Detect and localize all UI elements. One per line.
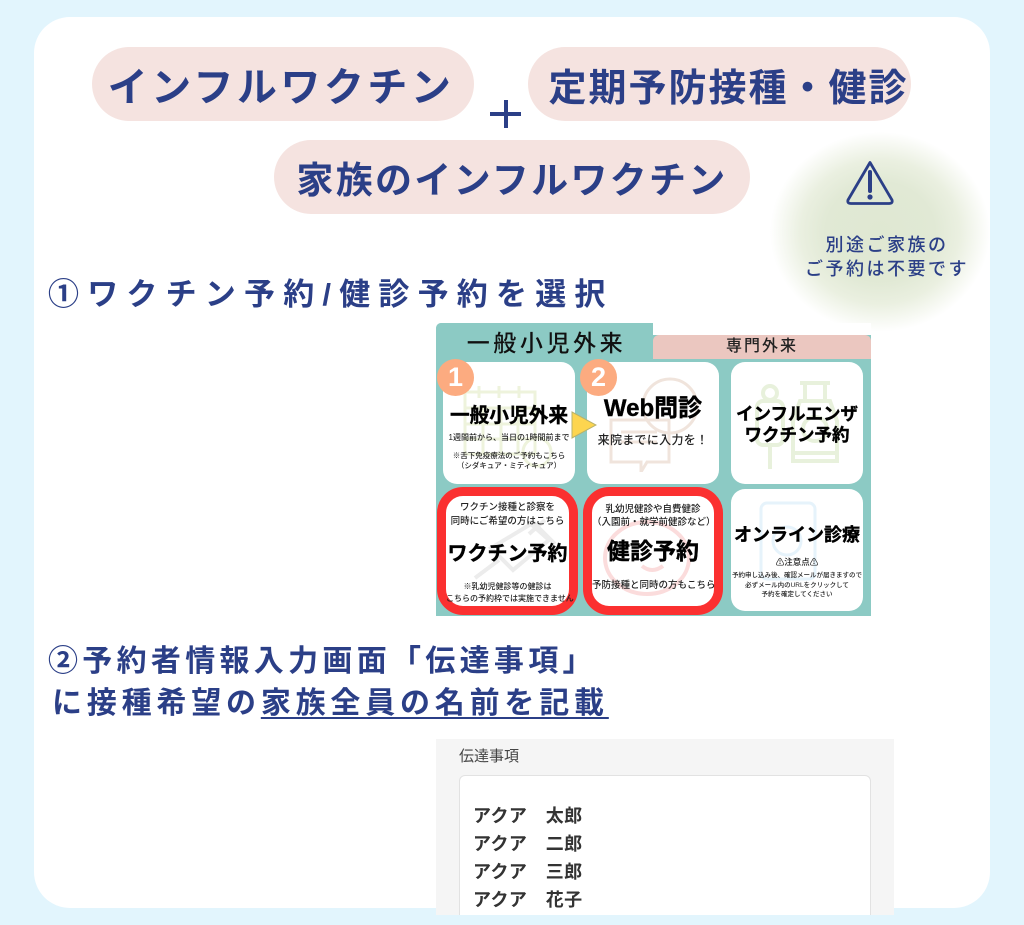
plus sign: [490, 100, 521, 128]
card caution note: [732, 572, 862, 598]
card caution note: 予約を確定してください: [761, 591, 833, 598]
card footnote: こちらの予約枠では実施できません: [446, 594, 574, 603]
icon: faint smartphone doctor: [760, 502, 816, 580]
card title: オンライン診療: [734, 525, 860, 545]
icon: faint calendar: [464, 386, 552, 468]
step 2 heading: ②予約者情報入力画面「伝達事項」: [48, 645, 597, 678]
heading pill: インフルワクチン: インフルワクチン: [108, 66, 454, 110]
card note: 来院までに入力を！: [598, 433, 708, 447]
text box with names: [459, 775, 871, 925]
heading pill: 家族のインフルワクチン: 家族のインフルワクチン: [296, 160, 728, 201]
callout: no separate family booking needed: [770, 132, 990, 332]
step 2 subheading: に接種希望の家族全員の名前を記載: [52, 687, 609, 720]
card footnote: 予防接種と同時の方もこちら: [592, 580, 716, 591]
card note: 1週間前から、当日の1時間前まで: [449, 433, 569, 442]
name list: アクア 太郎: [473, 806, 582, 826]
callout text: 別途ご家族の: [826, 235, 948, 255]
icon: faint baby face: [603, 520, 691, 596]
numbered badge 2: [580, 359, 617, 396]
card title: 一般小児外来: [450, 405, 568, 427]
card heading note: （入園前・就学前健診など）: [592, 517, 716, 528]
card footnote: （シダキュア・ミティキュア）: [457, 460, 561, 470]
card title: インフルエンザ: [736, 404, 858, 424]
card heading note: ワクチン接種と診察を: [460, 502, 555, 513]
heading pill: 家族のインフルワクチン: [274, 140, 750, 214]
name list: アクア 三郎: [473, 862, 582, 882]
card: online consultation: [731, 489, 863, 611]
card: general pediatrics: [443, 362, 575, 484]
card heading note: [451, 502, 564, 527]
card: health check booking, red outline: [583, 487, 723, 615]
icon: faint vaccine vial: [755, 381, 839, 469]
step 1 heading: ①ワクチン予約/健診予約を選択: [48, 277, 614, 312]
card title: ワクチン予約: [448, 543, 568, 565]
card title: ワクチン予約: [744, 425, 850, 445]
callout text: ご予約は不要です: [805, 259, 969, 279]
card heading note: [592, 504, 716, 528]
card title: Web問診: [604, 395, 702, 422]
card caution heading: ⚠注意点⚠: [776, 557, 818, 567]
card: vaccine booking, red outline: [437, 487, 578, 615]
icon: faint syringe: [474, 518, 556, 580]
card footnote: ※乳幼児健診等の健診は: [464, 582, 552, 591]
card heading note: 乳幼児健診や自費健診: [605, 504, 700, 515]
card footnote: [446, 582, 574, 603]
tab background: white corner: [653, 323, 871, 335]
numbered badge 1: [437, 359, 474, 396]
name list: アクア 花子: [473, 890, 582, 910]
name list: アクア 二郎: [473, 834, 582, 854]
heading pill: 定期予防接種・健診: [528, 47, 911, 121]
tab: specialist outpatient: 専門外来: [726, 338, 798, 355]
card caution note: 必ずメール内のURLをクリックして: [745, 582, 849, 588]
screenshot: booking menu: [436, 323, 871, 616]
name list: [473, 806, 582, 910]
tab: specialist outpatient: [653, 335, 871, 359]
numbered badge 1: 1: [448, 362, 463, 392]
card title: [736, 404, 858, 445]
tab: general pediatrics: 一般小児外来: [467, 330, 626, 356]
icon: warning triangle: [846, 161, 894, 205]
callout text: [805, 235, 969, 279]
card caution note: 予約申し込み後、確認メールが届きますので: [732, 572, 862, 579]
icon: faint speech bubble: [610, 378, 698, 472]
arrow: yellow triangle: [572, 411, 597, 439]
card: influenza vaccine booking: [731, 362, 863, 484]
card title: 健診予約: [607, 538, 699, 564]
card heading note: 同時にご希望の方はこちら: [451, 516, 564, 527]
numbered badge 2: 2: [591, 362, 606, 392]
heading pill: インフルワクチン: [92, 47, 474, 121]
card footnote: ※舌下免疫療法のご予約もこちら: [453, 451, 565, 460]
card footnote: [453, 451, 565, 470]
card: web questionnaire: [587, 362, 719, 484]
field label: 伝達事項: [459, 748, 519, 765]
heading pill: 定期予防接種・健診: 定期予防接種・健診: [548, 68, 908, 110]
screenshot: message field: [436, 739, 894, 915]
tab: general pediatrics: [436, 323, 653, 359]
